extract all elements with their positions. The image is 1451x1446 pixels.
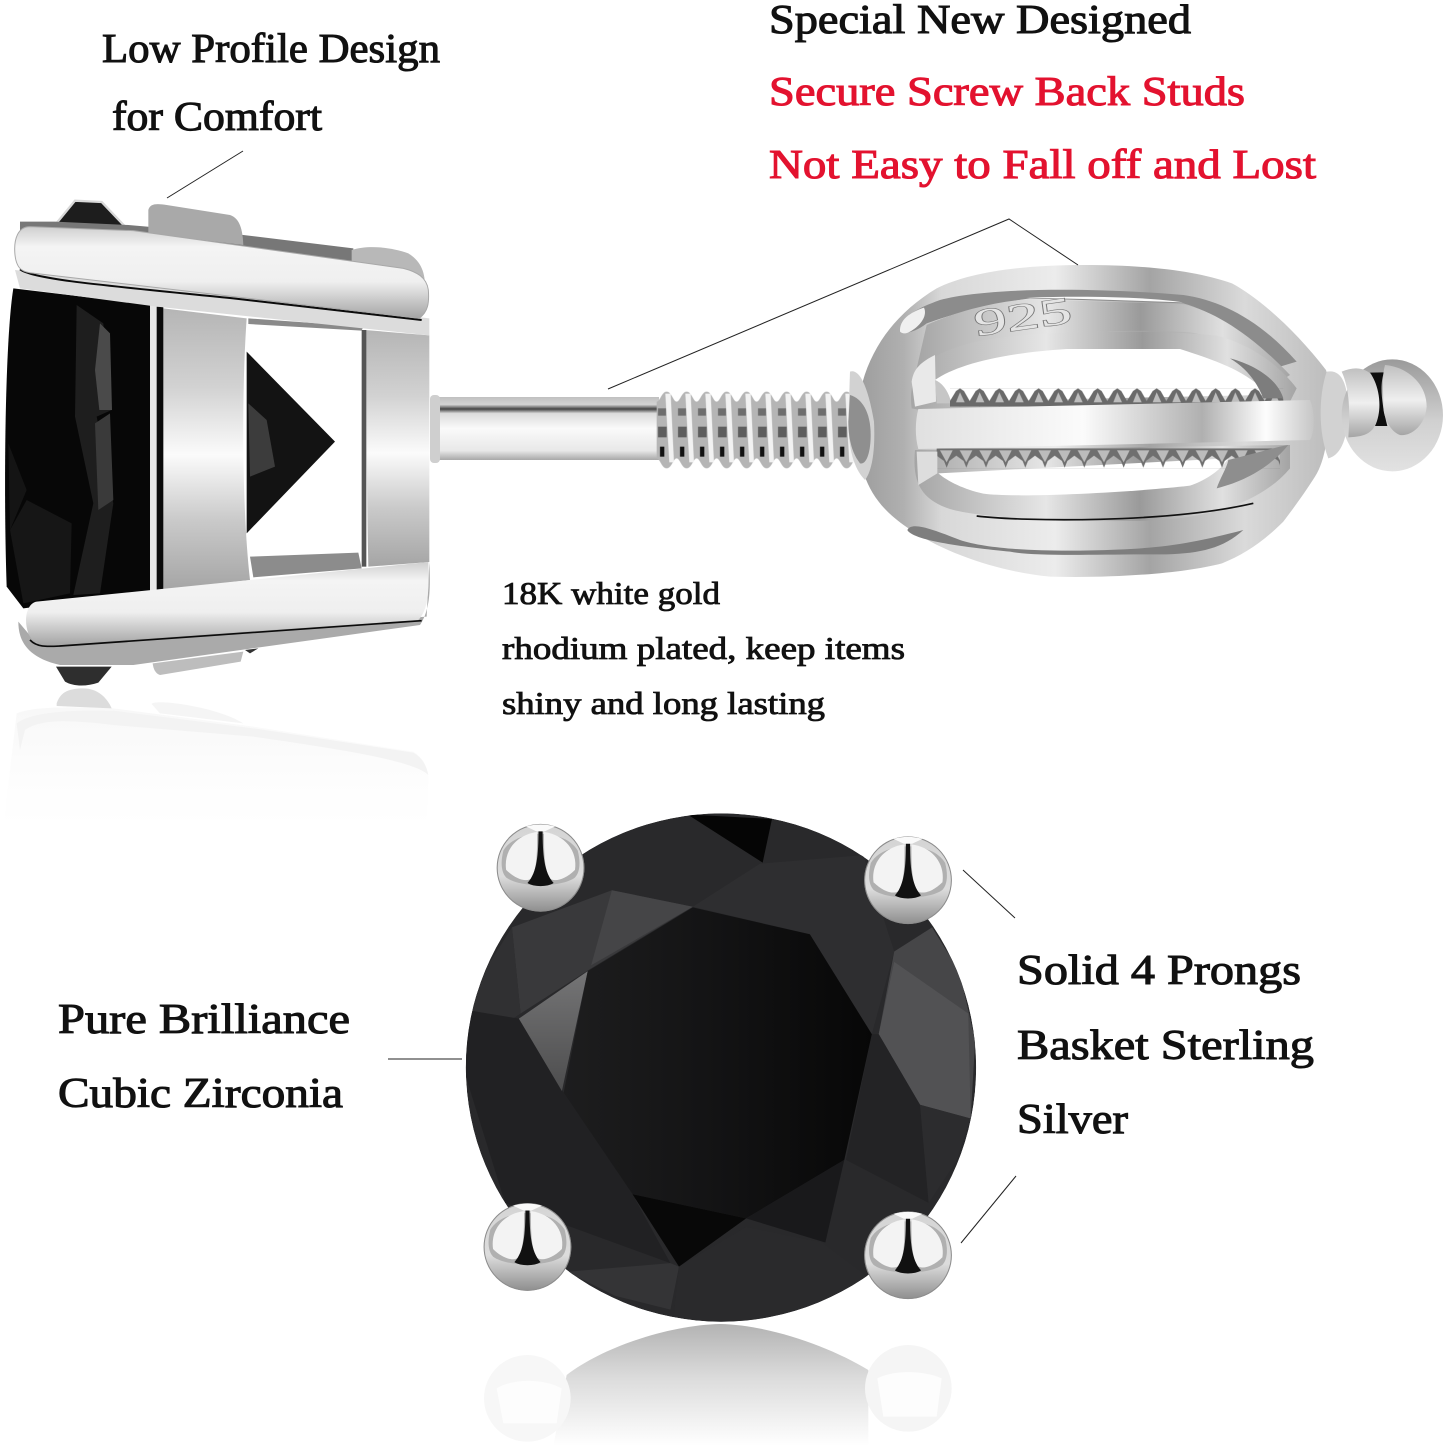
- vertical setting wall right: [365, 330, 429, 567]
- frame around upper window: [911, 331, 1297, 410]
- frame around lower window: [914, 445, 1290, 521]
- cage body: [857, 265, 1329, 577]
- screw back cage: [848, 265, 1329, 577]
- callout: low profile design: [102, 25, 440, 198]
- reflection: front view stone: [484, 1324, 952, 1446]
- prong bottom right: [864, 1211, 952, 1299]
- prong bottom left: [484, 1203, 571, 1291]
- callout: cubic zirconia: Cubic Zirconia: [58, 1071, 343, 1117]
- callout: solid prongs: Silver: [1017, 1097, 1128, 1143]
- inscribed rib: [917, 299, 1290, 383]
- callout: rhodium plating: shiny and long lasting: [502, 685, 825, 721]
- hallmark 925: 925: [971, 290, 1074, 345]
- silver collar below top prong: [15, 270, 429, 335]
- central bar: [916, 400, 1314, 449]
- bottom prong: [26, 562, 429, 645]
- threaded post: [657, 392, 877, 468]
- prong top right: [864, 837, 952, 924]
- vertical setting wall left: [163, 308, 250, 590]
- prong top left: [497, 824, 584, 912]
- reflection: side view earring: [3, 688, 428, 827]
- callout: cubic zirconia: [58, 997, 462, 1117]
- callout: solid prongs: [961, 870, 1314, 1243]
- bottom tab and stone tip: [56, 648, 258, 686]
- callout: cubic zirconia: Pure Brilliance: [58, 997, 350, 1043]
- top prong: [15, 227, 429, 318]
- earring side view: setting and stone: [5, 201, 430, 686]
- stone side: [5, 288, 152, 608]
- upper window with screw teeth: [935, 349, 1283, 407]
- lower slot: [907, 526, 1243, 555]
- callout: secure screw back: [608, 0, 1317, 389]
- earring post: [430, 395, 659, 463]
- callout: low profile design: Low Profile Design: [102, 25, 440, 71]
- callout: rhodium plating: [502, 575, 905, 721]
- callout: rhodium plating: 18K white gold: [502, 575, 720, 611]
- callout: solid prongs: Solid 4 Prongs: [1017, 948, 1301, 994]
- callout: low profile design: for Comfort: [112, 93, 323, 139]
- lower window with screw teeth: [917, 445, 1288, 495]
- callout: secure screw back: Secure Screw Back Studs: [769, 68, 1245, 114]
- stone: [465, 813, 976, 1323]
- seam line: [977, 503, 1253, 520]
- basket window: [245, 318, 363, 577]
- upper slot between ribs: [900, 290, 1297, 367]
- back stone tip: [55, 201, 128, 230]
- callout: solid prongs: Basket Sterling: [1017, 1023, 1314, 1069]
- bottom prong collar: [18, 562, 430, 665]
- top back rim and tabs: [20, 204, 425, 287]
- earring front view: [465, 813, 976, 1323]
- threaded collar: [848, 371, 874, 480]
- callout: secure screw back: Not Easy to Fall off and Lost: [769, 141, 1317, 187]
- callout: rhodium plating: rhodium plated, keep items: [502, 630, 905, 666]
- screw back ball end: [1321, 359, 1443, 471]
